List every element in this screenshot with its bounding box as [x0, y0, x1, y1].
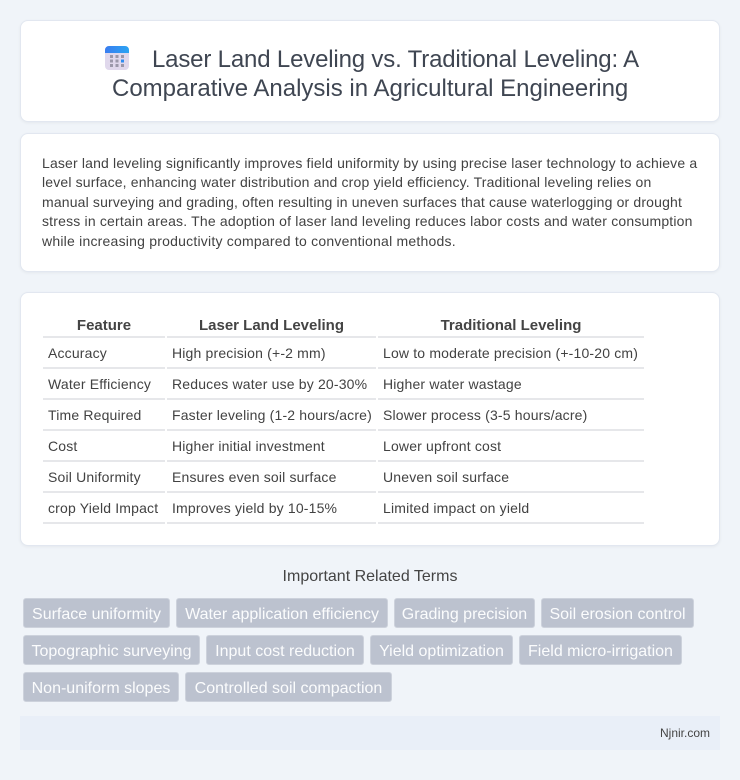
comparison table: crop Yield Impact	[48, 500, 158, 516]
related terms tags: Topographic surveying	[31, 643, 192, 660]
comparison table: Ensures even soil surface	[172, 469, 337, 485]
heading	[112, 46, 639, 102]
comparison table: Time Required	[48, 407, 142, 423]
summary paragraph: level surface, enhancing water distribution and crop yield efficiency. Traditional leveling relies on	[42, 174, 651, 190]
footer credit: Njnir.com	[660, 726, 710, 740]
comparison table: Reduces water use by 20-30%	[172, 376, 367, 392]
comparison table: Improves yield by 10-15%	[172, 500, 337, 516]
heading: Comparative Analysis in Agricultural Engineering	[112, 75, 628, 102]
comparison table: Lower upfront cost	[383, 438, 501, 454]
comparison table: Water Efficiency	[48, 376, 151, 392]
related terms tags: Non-uniform slopes	[32, 680, 170, 697]
comparison table: High precision (+-2 mm)	[172, 345, 326, 361]
summary paragraph: Laser land leveling significantly improves field uniformity by using precise laser technology to achieve a	[42, 155, 697, 171]
panel: summary text	[20, 133, 720, 272]
summary paragraph	[42, 155, 698, 249]
title card	[20, 20, 720, 122]
comparison table: Feature	[77, 317, 131, 334]
related terms tags: Input cost reduction	[215, 643, 355, 660]
heading: Laser Land Leveling vs. Traditional Leveling: A	[152, 46, 639, 73]
related terms tags: Surface uniformity	[32, 606, 161, 623]
comparison table: Low to moderate precision (+-10-20 cm)	[383, 345, 638, 361]
related terms tags: Grading precision	[402, 606, 527, 623]
comparison table: Accuracy	[48, 345, 107, 361]
panel: comparison table	[20, 292, 720, 546]
comparison table: Cost	[48, 438, 77, 454]
related terms tags	[23, 598, 694, 702]
comparison table: Slower process (3-5 hours/acre)	[383, 407, 587, 423]
icon: calendar	[105, 46, 129, 70]
footer bar	[20, 716, 720, 750]
related terms tags: Yield optimization	[379, 643, 504, 660]
comparison table: Limited impact on yield	[383, 500, 529, 516]
comparison table: Traditional Leveling	[441, 317, 581, 334]
related terms heading: Important Related Terms	[283, 568, 457, 585]
comparison table: Soil Uniformity	[48, 469, 141, 485]
comparison table: Laser Land Leveling	[199, 317, 344, 334]
summary paragraph: while increasing productivity compared to conventional methods.	[42, 233, 456, 249]
comparison table: Higher water wastage	[383, 376, 522, 392]
related terms tags: Controlled soil compaction	[195, 680, 382, 697]
comparison table: Faster leveling (1-2 hours/acre)	[172, 407, 372, 423]
comparison table: Uneven soil surface	[383, 469, 509, 485]
comparison table: Higher initial investment	[172, 438, 325, 454]
summary paragraph: stress in certain areas. The adoption of laser land leveling reduces labor costs and water consumption	[42, 213, 693, 229]
summary paragraph: manual surveying and grading, often resulting in uneven surfaces that cause waterlogging or drought	[42, 194, 682, 210]
related terms tags: Soil erosion control	[549, 606, 686, 623]
related terms tags: Water application efficiency	[185, 606, 379, 623]
comparison table	[43, 317, 644, 524]
related terms tags: Field micro-irrigation	[528, 643, 673, 660]
